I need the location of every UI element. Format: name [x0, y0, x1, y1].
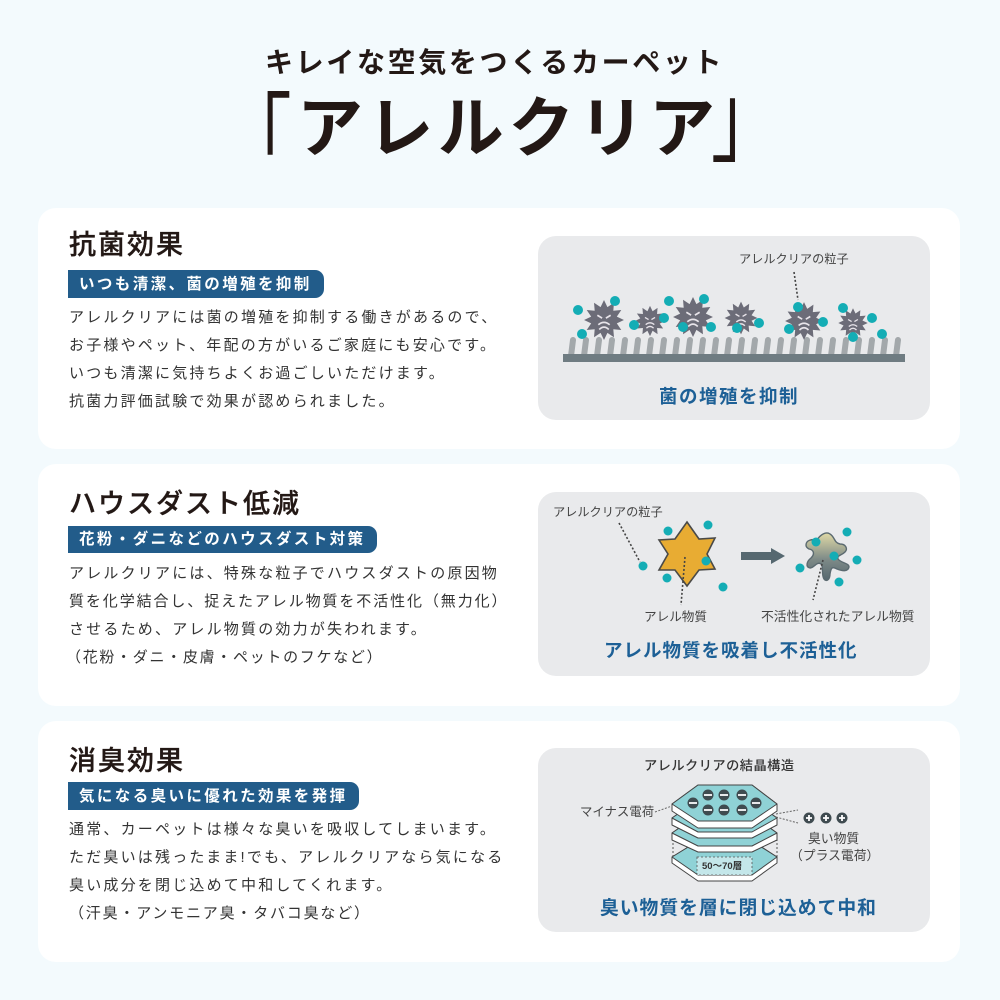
badge: antibacterial [68, 270, 324, 298]
arrow [741, 548, 785, 564]
text block: deodorant: （汗臭・アンモニア臭・タバコ臭など） [69, 905, 371, 922]
text block: antibacterial [69, 309, 498, 410]
badge: deodorant: 気になる臭いに優れた効果を発揮 [79, 788, 348, 805]
text block: house dust: アレルクリアには、特殊な粒子でハウスダストの原因物 [69, 565, 499, 582]
text block: house dust: （花粉・ダニ・皮膚・ペットのフケなど） [66, 649, 383, 666]
badge: antibacterial: いつも清潔、菌の増殖を抑制 [79, 276, 312, 293]
diagram caption: アレル物質を吸着し不活性化 [604, 640, 858, 661]
diagram: carpet with bacteria [563, 251, 905, 407]
opening bracket: 「 [223, 85, 292, 195]
title: キレイな空気をつくるカーペット [265, 47, 724, 78]
text block: deodorant: 臭い成分を閉じ込めて中和してくれます。 [69, 877, 393, 894]
plus charges [804, 812, 848, 824]
layer: top [672, 785, 777, 828]
layer label: 50〜70層 [702, 861, 742, 872]
badge: house dust [68, 526, 377, 553]
panel: house dust card [38, 464, 960, 706]
diagram caption: 臭い物質を層に閉じ込めて中和 [600, 897, 877, 918]
panel: antibacterial card [38, 208, 960, 449]
heading: house dust: ハウスダスト低減 [69, 489, 301, 519]
panel: deodorant diagram background [538, 748, 930, 932]
text block: antibacterial: いつも清潔に気持ちよくお過ごしいただけます。 [69, 365, 446, 382]
dotted sides [673, 835, 777, 860]
text block: house dust [66, 565, 508, 666]
label: particles: アレルクリアの粒子 [553, 504, 663, 519]
carpet fibers [571, 340, 898, 356]
icon: inactivated allergen [806, 533, 849, 580]
text block: deodorant [69, 821, 504, 922]
minus charges [688, 790, 762, 816]
text block: house dust: 質を化学結合し、捉えたアレル物質を不活性化（無力化） [69, 593, 508, 610]
leader line [794, 272, 798, 300]
label: minus charge: マイナス電荷 [580, 805, 654, 819]
layer label [697, 857, 752, 875]
heading: deodorant: 消臭効果 [69, 746, 185, 776]
carpet base [563, 354, 905, 362]
text block: house dust: させるため、アレル物質の効力が失われます。 [69, 621, 428, 638]
label: allergen: アレル物質 [644, 609, 707, 624]
label: odor substance: 臭い物質 [808, 831, 859, 846]
diagram caption: 菌の増殖を抑制 [659, 386, 799, 407]
layer: third [672, 815, 777, 852]
leader lines [655, 806, 798, 823]
closing bracket: 」 [711, 64, 780, 174]
text block: antibacterial: アレルクリアには菌の増殖を抑制する働きがあるので、 [69, 309, 498, 326]
diagram: allergen inactivation [553, 504, 915, 661]
label: plus charge: （プラス電荷） [790, 848, 879, 863]
badge: deodorant [68, 782, 359, 810]
text block: deodorant: 通常、カーペットは様々な臭いを吸収してしまいます。 [69, 821, 497, 838]
particles [638, 520, 862, 592]
badge: house dust: 花粉・ダニなどのハウスダスト対策 [79, 531, 365, 548]
layer: bottom [672, 841, 777, 881]
panel: antibacterial diagram background [538, 236, 930, 420]
diagram: crystal structure [580, 758, 879, 918]
label: crystal structure: アレルクリアの結晶構造 [644, 758, 795, 773]
panel: deodorant card [38, 721, 960, 962]
bacteria [584, 297, 868, 340]
heading: antibacterial: 抗菌効果 [69, 230, 185, 260]
particles [573, 294, 887, 342]
main product name: アレルクリア [297, 91, 719, 165]
layer: second [672, 800, 777, 838]
text block: deodorant: ただ臭いは残ったまま!でも、アレルクリアなら気になる [69, 849, 504, 866]
label: inactivated allergen: 不活性化されたアレル物質 [761, 609, 915, 624]
icon: allergen star [659, 522, 715, 586]
text block: antibacterial: お子様やペット、年配の方がいるご家庭にも安心です。 [69, 337, 497, 354]
panel: house dust diagram background [538, 492, 930, 676]
text block: antibacterial: 抗菌力評価試験で効果が認められました。 [69, 393, 396, 410]
leader lines [619, 523, 823, 605]
label: particles: アレルクリアの粒子 [739, 251, 849, 266]
